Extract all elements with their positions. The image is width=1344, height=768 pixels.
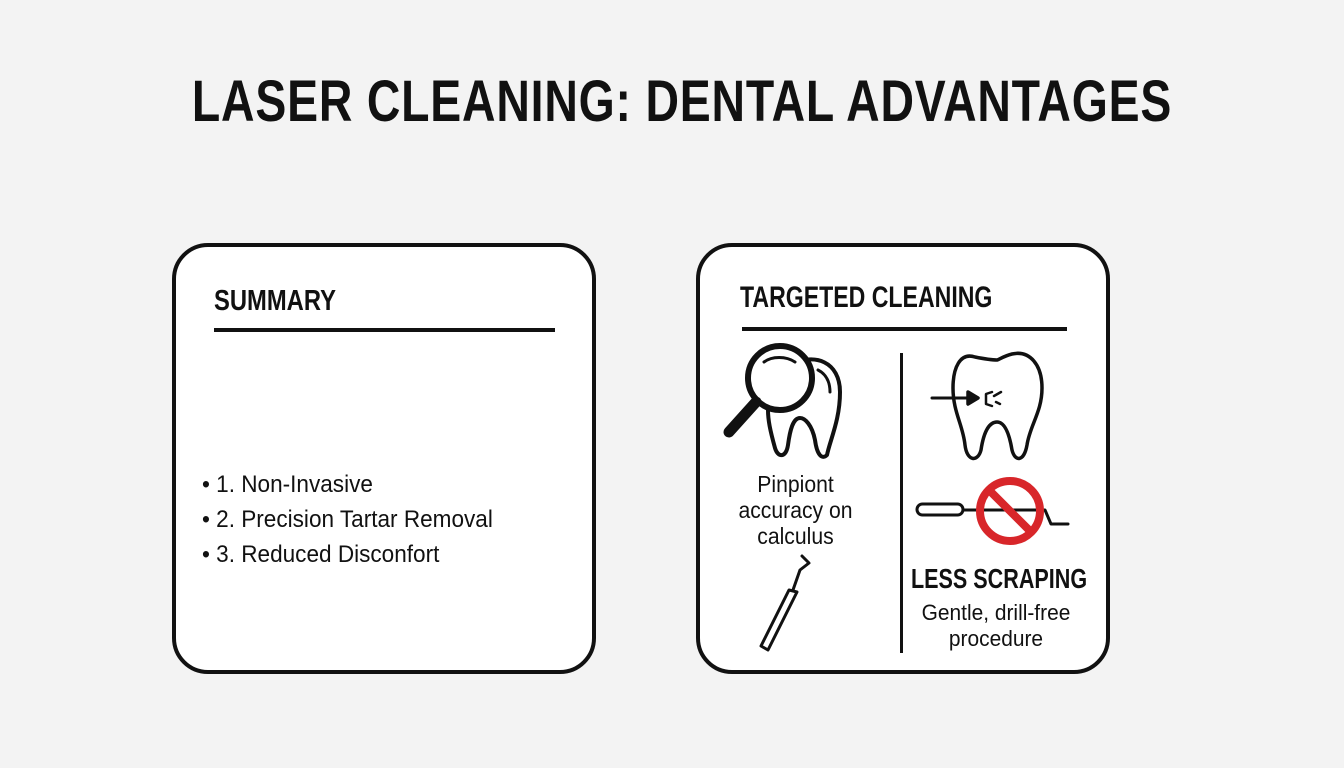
caption: pinpoint	[738, 471, 853, 549]
panel: targeted cleaning	[696, 243, 1110, 674]
caption: gentle	[922, 600, 1070, 651]
heading: less scraping: LESS SCRAPING	[911, 563, 1087, 594]
icon: tooth with magnifier	[729, 346, 840, 457]
icon: tooth with arrow	[932, 353, 1042, 458]
title: LASER CLEANING: DENTAL ADVANTAGES	[192, 69, 1172, 134]
caption: pinpoint: calculus	[757, 523, 834, 549]
caption: gentle: procedure	[949, 626, 1043, 651]
icon: no scraper	[917, 481, 1068, 541]
bullet list: • 2. Precision Tartar Removal	[202, 506, 493, 533]
vertical divider	[900, 353, 903, 653]
caption: pinpoint: accuracy on	[738, 497, 853, 523]
heading: targeted cleaning: TARGETED CLEANING	[740, 281, 992, 314]
bullet list: • 3. Reduced Disconfort	[202, 541, 439, 568]
divider	[214, 328, 555, 332]
caption: pinpoint: Pinpiont	[757, 471, 834, 497]
bullet list	[202, 471, 493, 568]
heading: summary: SUMMARY	[214, 285, 336, 317]
divider	[742, 327, 1067, 331]
caption: gentle: Gentle, drill-free	[922, 600, 1070, 625]
icon: probe	[761, 556, 809, 650]
bullet list: • 1. Non-Invasive	[202, 471, 373, 498]
panel: summary	[172, 243, 596, 674]
